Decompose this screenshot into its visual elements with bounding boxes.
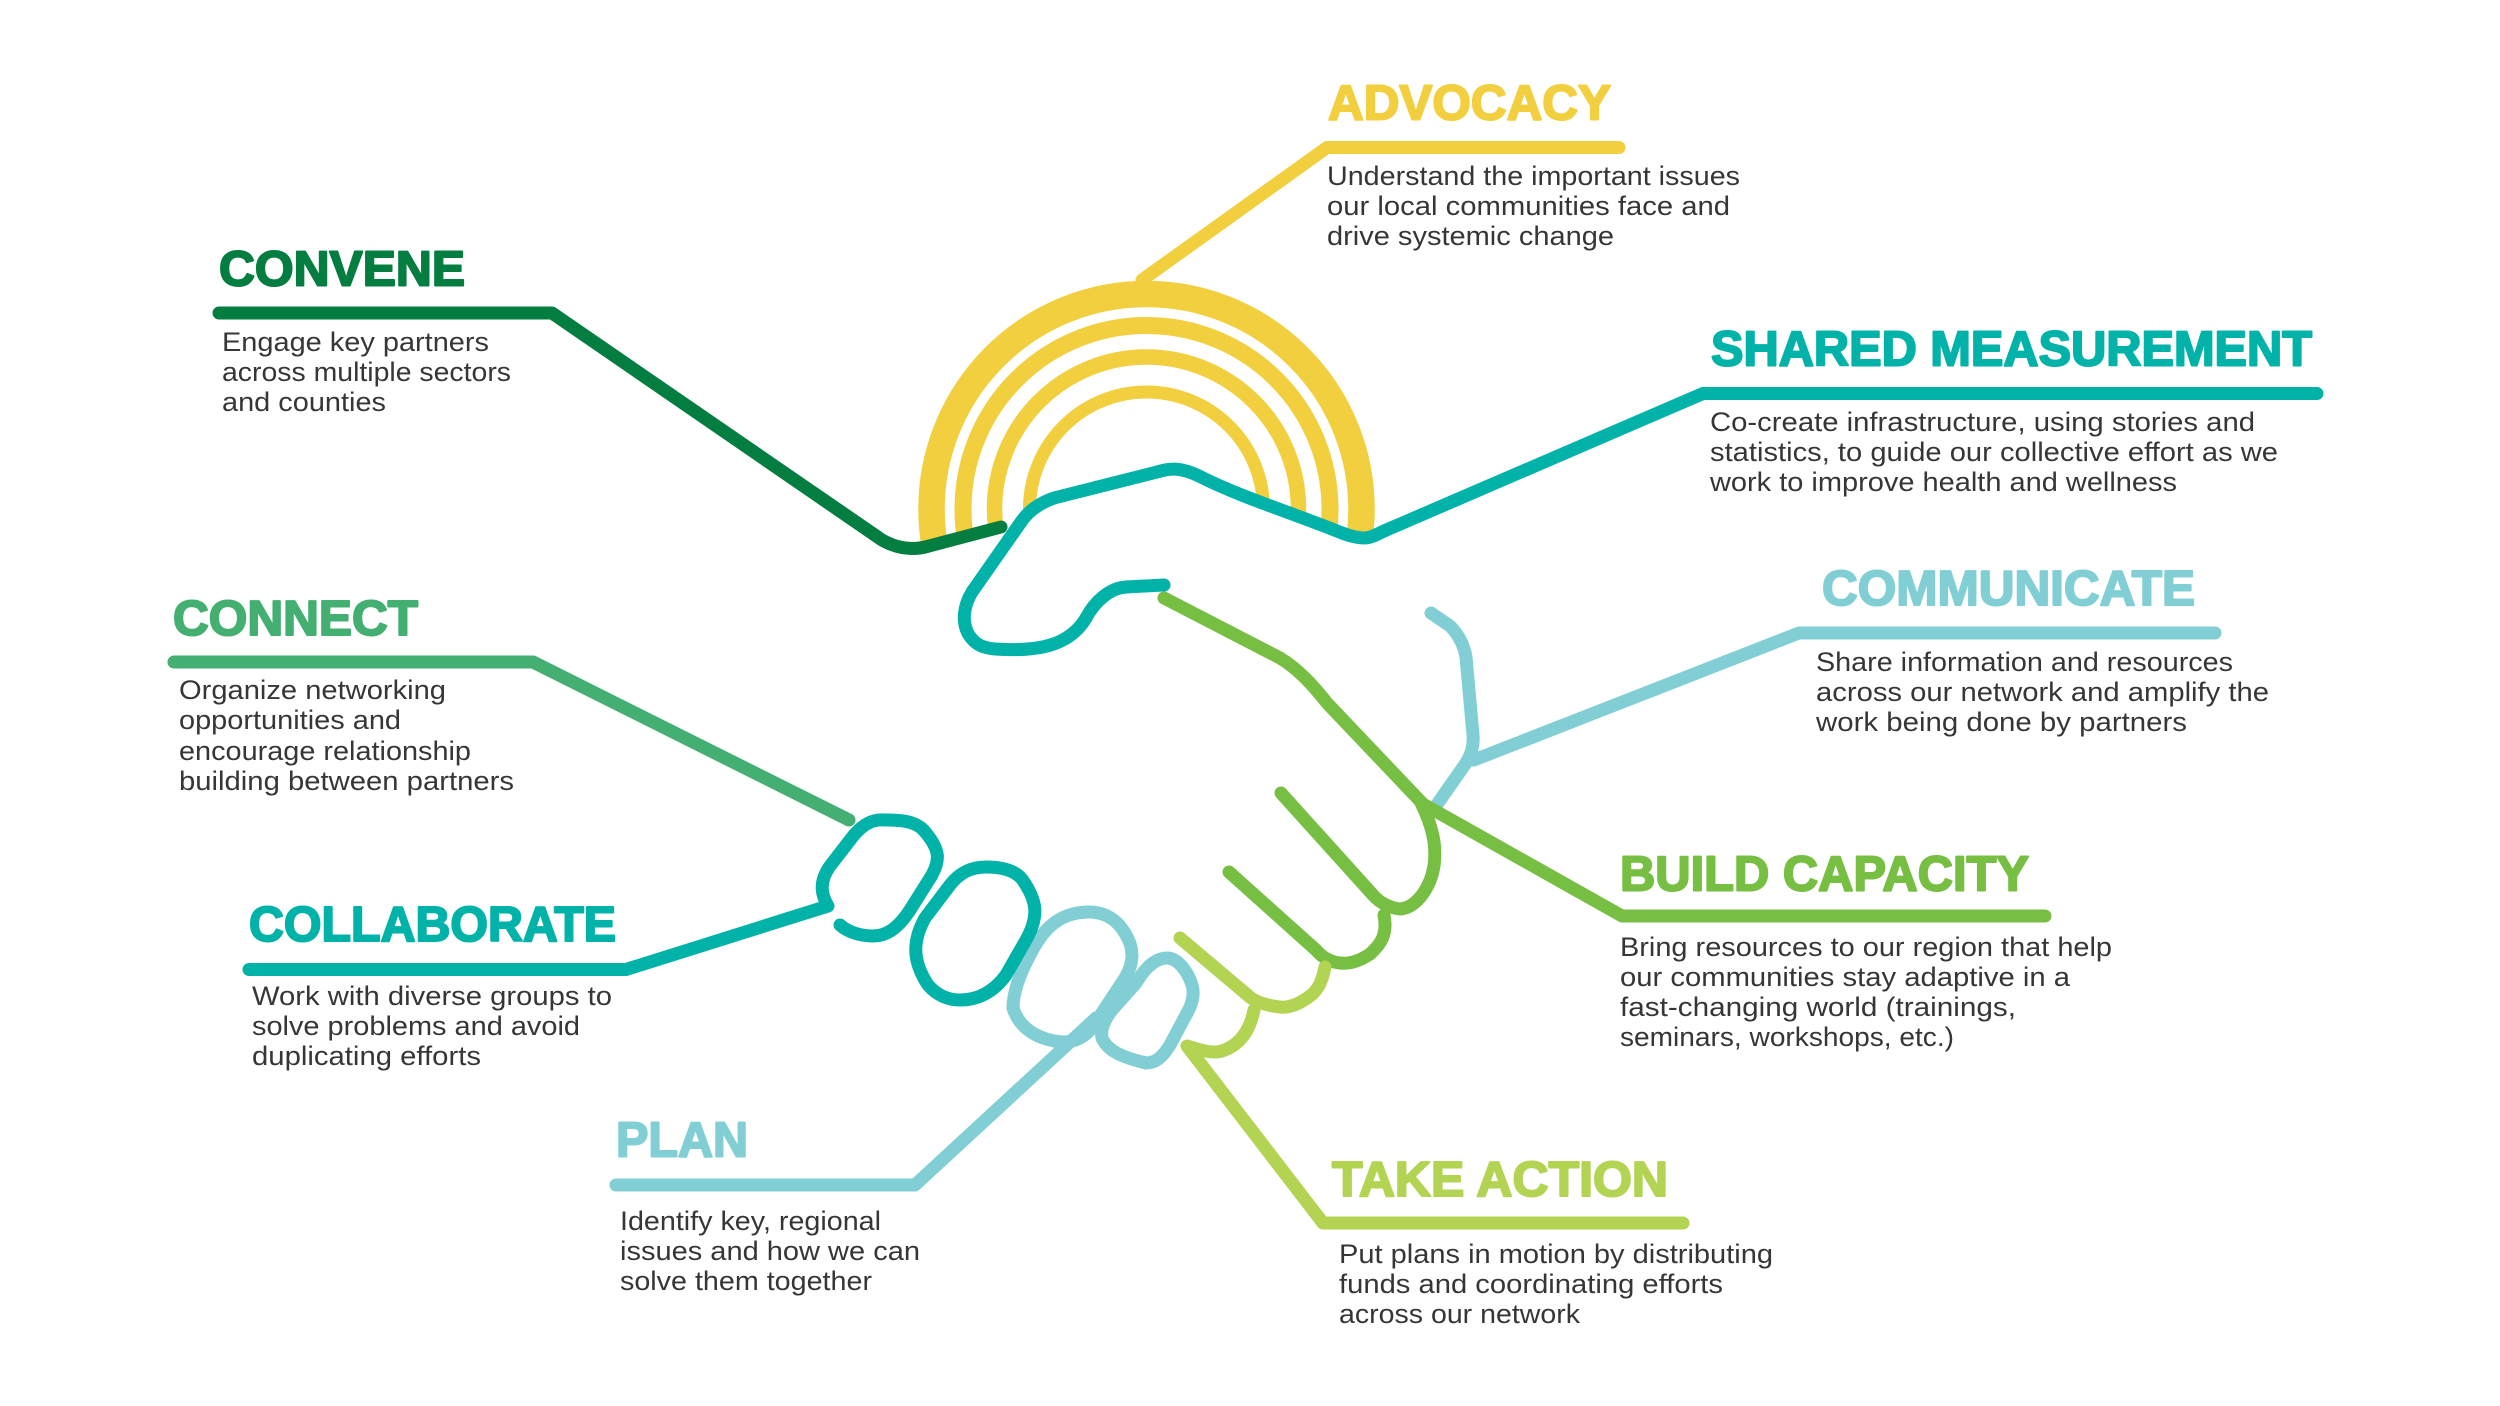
panel: connect — [173, 592, 514, 796]
icon: light teal finger small — [1102, 958, 1193, 1063]
heading: connect: CONNECT — [173, 592, 418, 646]
heading: collaborate: COLLABORATE — [249, 898, 616, 952]
connector: advocacy yellow line — [1142, 148, 1619, 280]
text: connect description: encourage relationship — [179, 736, 471, 766]
text: connect description: Organize networking — [179, 675, 446, 705]
text: build capacity description: fast-changing world (trainings, — [1620, 992, 2016, 1022]
text: communicate description: Share information and resources — [1816, 647, 2233, 677]
text: convene description — [222, 327, 511, 417]
connector and hand: collaborate teal line with first finger — [249, 820, 937, 970]
text: connect description: opportunities and — [179, 705, 401, 735]
heading: take action: TAKE ACTION — [1332, 1153, 1668, 1207]
text: take action description: funds and coordinating efforts — [1339, 1269, 1723, 1299]
text: convene description: and counties — [222, 387, 386, 417]
text: advocacy description: our local communities face and — [1327, 191, 1730, 221]
text: collaborate description: Work with diverse groups to — [252, 981, 612, 1011]
text: take action description: across our network — [1339, 1299, 1581, 1329]
text: plan description — [620, 1206, 920, 1296]
connector and hand: build capacity green line — [1164, 598, 2045, 916]
connector: communicate light teal line — [1474, 633, 2215, 760]
text: communicate description: work being done by partners — [1815, 707, 2187, 737]
text: plan description: solve them together — [620, 1266, 872, 1296]
text: plan description: issues and how we can — [620, 1236, 920, 1266]
text: connect description — [179, 675, 514, 796]
text: collaborate description: solve problems and avoid — [252, 1011, 580, 1041]
panel: take action — [1332, 1153, 1773, 1329]
heading: plan: PLAN — [616, 1114, 748, 1168]
heading: communicate: COMMUNICATE — [1822, 562, 2195, 616]
icon: teal finger two — [916, 867, 1035, 1000]
panel: plan — [616, 1114, 920, 1296]
text: communicate description: across our network and amplify the — [1816, 677, 2269, 707]
icon: yellow concentric arches (sun) — [918, 280, 1375, 542]
connector and hand: shared measurement teal line forming upper hand — [964, 394, 2317, 650]
connector: convene dark green line and thumb — [219, 313, 1001, 548]
text: advocacy description — [1327, 161, 1740, 251]
icon: green finger one — [1281, 793, 1435, 909]
text: connect description: building between partners — [179, 766, 514, 796]
text: shared measurement description: work to improve health and wellness — [1709, 467, 2177, 497]
heading: convene: CONVENE — [219, 242, 465, 296]
text: take action description — [1339, 1239, 1773, 1329]
text: collaborate description: duplicating efforts — [252, 1041, 481, 1071]
text: communicate description — [1815, 647, 2269, 737]
text: take action description: Put plans in motion by distributing — [1339, 1239, 1773, 1269]
icon: thumb of lower hand — [1431, 613, 1473, 803]
heading: advocacy: ADVOCACY — [1328, 76, 1611, 130]
text: collaborate description — [252, 981, 612, 1071]
connector: plan light teal line — [616, 1018, 1096, 1185]
icon: lime finger three — [1180, 938, 1325, 1007]
text: build capacity description: Bring resources to our region that help — [1620, 932, 2112, 962]
text: convene description: across multiple sectors — [222, 357, 511, 387]
text: convene description: Engage key partners — [222, 327, 489, 357]
panel: convene — [219, 242, 511, 417]
text: build capacity description — [1620, 932, 2112, 1052]
text: advocacy description: Understand the important issues — [1327, 161, 1740, 191]
text: build capacity description: seminars, workshops, etc.) — [1620, 1022, 1954, 1052]
panel: communicate — [1815, 562, 2269, 737]
icon: green finger two — [1229, 872, 1385, 963]
text: advocacy description: drive systemic change — [1327, 221, 1614, 251]
connector: connect green line — [174, 662, 849, 820]
connector and hand: take action lime line with finger four — [1187, 1010, 1683, 1223]
text: plan description: Identify key, regional — [620, 1206, 881, 1236]
text: shared measurement description: Co-create infrastructure, using stories and — [1710, 407, 2255, 437]
heading: build capacity: BUILD CAPACITY — [1620, 848, 2029, 902]
text: shared measurement description: statistics, to guide our collective effort as we — [1710, 437, 2278, 467]
panel: shared measurement — [1709, 322, 2312, 497]
panel: collaborate — [249, 898, 616, 1071]
icon: light teal finger large — [1013, 912, 1132, 1042]
heading: shared measurement: SHARED MEASUREMENT — [1711, 322, 2312, 376]
panel: advocacy — [1327, 76, 1740, 251]
panel: build capacity — [1620, 848, 2112, 1052]
text: shared measurement description — [1709, 407, 2278, 497]
text: build capacity description: our communities stay adaptive in a — [1620, 962, 2071, 992]
